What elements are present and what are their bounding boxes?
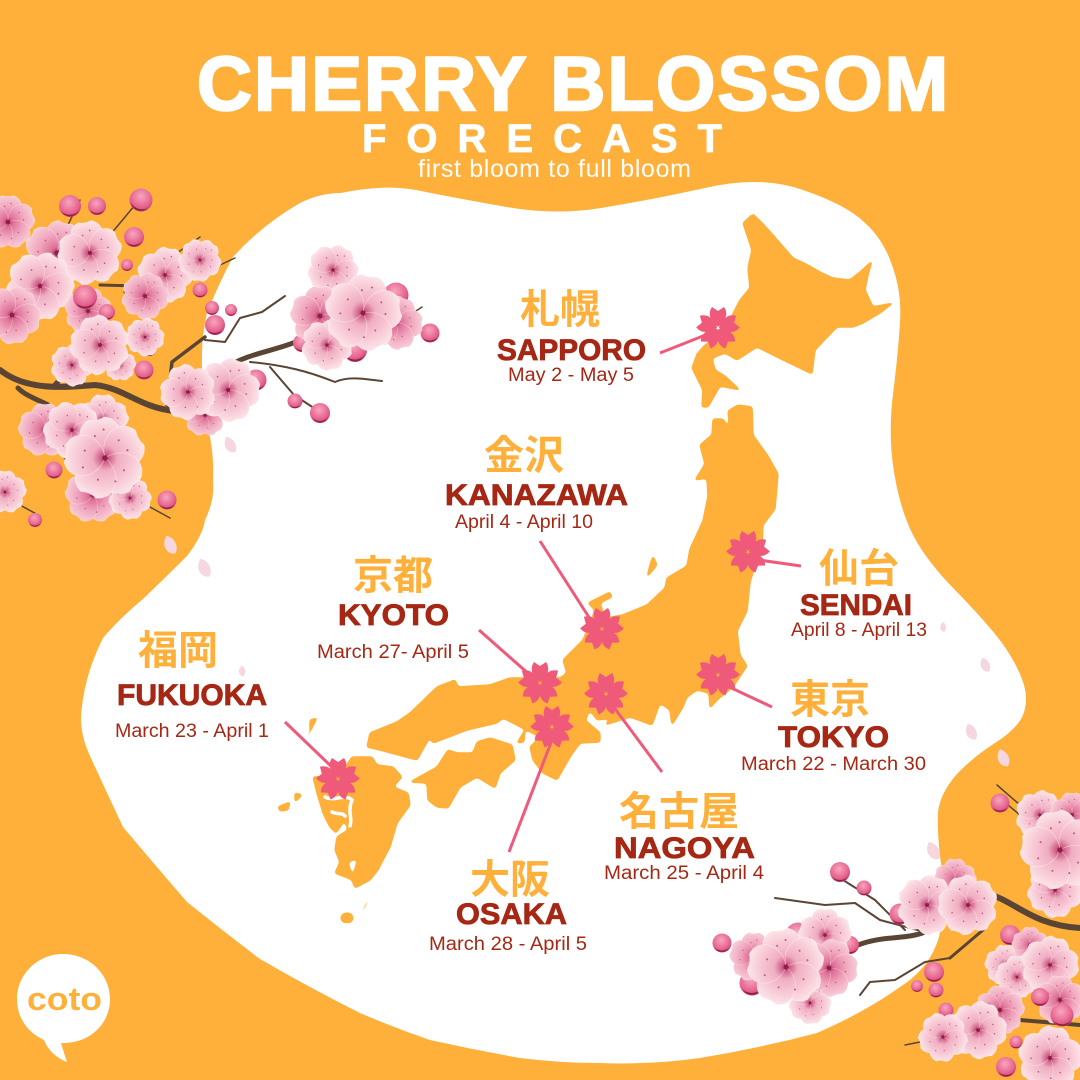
label: Sendai bbox=[791, 547, 927, 641]
label: Sendai: SENDAI bbox=[800, 589, 912, 622]
label: Sendai: April 8 - April 13 bbox=[791, 620, 927, 641]
tagline: first bloom to full bloom bbox=[418, 155, 691, 183]
label: Nagoya: 名古屋 bbox=[619, 790, 739, 834]
label: Tokyo: TOKYO bbox=[778, 721, 889, 754]
label: Tokyo: 東京 bbox=[790, 678, 870, 722]
pointer lines bbox=[285, 334, 801, 852]
label: Kanazawa: 金沢 bbox=[484, 434, 564, 478]
label: Sendai: 仙台 bbox=[819, 547, 899, 591]
Awaji island bbox=[517, 730, 525, 743]
Shikoku bbox=[410, 738, 515, 808]
label: Kyoto: March 27- April 5 bbox=[317, 642, 469, 663]
Yakushima island bbox=[341, 913, 353, 923]
logo: coto speech bubble bbox=[17, 954, 110, 1062]
label: Fukuoka: March 23 - April 1 bbox=[115, 721, 269, 742]
label: Sapporo: May 2 - May 5 bbox=[508, 365, 634, 386]
label: Fukuoka bbox=[115, 629, 269, 742]
Sado island bbox=[647, 556, 657, 577]
label: Kyoto: 京都 bbox=[353, 554, 433, 598]
map markers: sakura flowers bbox=[315, 307, 771, 801]
label: Kyoto bbox=[317, 554, 469, 663]
title: CHERRY BLOSSOM bbox=[197, 42, 948, 127]
label: Osaka: March 28 - April 5 bbox=[429, 934, 587, 955]
label: Osaka: OSAKA bbox=[456, 898, 567, 931]
label: Fukuoka: 福岡 bbox=[138, 629, 218, 673]
cherry branch: bottom right bbox=[712, 783, 1080, 1080]
label: Osaka bbox=[429, 858, 587, 955]
logo: coto speech bubble: coto bbox=[27, 981, 102, 1017]
subtitle: forecast: FORECAST bbox=[362, 117, 722, 161]
label: Kanazawa bbox=[445, 434, 628, 533]
falling petals bbox=[161, 435, 1012, 862]
label: Osaka: 大阪 bbox=[470, 858, 550, 902]
Kyushu bbox=[313, 757, 410, 888]
label: Tokyo: March 22 - March 30 bbox=[741, 754, 926, 775]
Hokkaido bbox=[692, 214, 893, 407]
label: Nagoya: March 25 - April 4 bbox=[604, 863, 764, 884]
label: Kanazawa: April 4 - April 10 bbox=[455, 512, 593, 533]
small islands bbox=[278, 718, 370, 917]
Kyushu west coast inlets bbox=[325, 797, 352, 826]
label: Sapporo bbox=[497, 288, 646, 386]
white map blob panel bbox=[81, 182, 1026, 1063]
cherry branch: top left bbox=[0, 185, 440, 530]
map of Japan bbox=[278, 214, 893, 923]
label: Sapporo: SAPPORO bbox=[497, 334, 646, 367]
label: Kyoto: KYOTO bbox=[338, 599, 449, 632]
label: Nagoya bbox=[604, 790, 764, 884]
label: Sapporo: 札幌 bbox=[520, 288, 600, 332]
label: Kanazawa: KANAZAWA bbox=[445, 479, 628, 512]
Honshu bbox=[367, 405, 778, 780]
label: Nagoya: NAGOYA bbox=[614, 832, 755, 865]
label: Fukuoka: FUKUOKA bbox=[117, 679, 267, 712]
label: Tokyo bbox=[741, 678, 926, 775]
